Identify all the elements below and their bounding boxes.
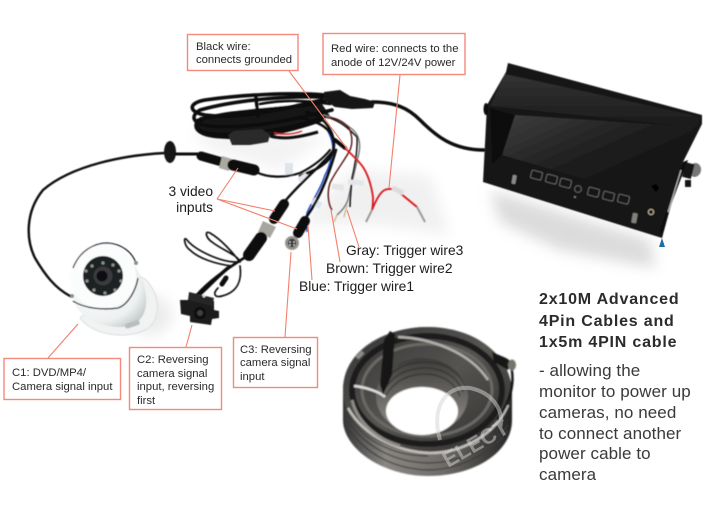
wire bundle xyxy=(192,94,332,145)
monitor buttons xyxy=(530,170,630,204)
text block: cable description: to connect another xyxy=(539,424,682,443)
callout: C3: C3: Reversing xyxy=(240,344,312,356)
trigger wires xyxy=(285,112,425,232)
callout: C3: camera signal xyxy=(240,357,310,369)
heading: cables: 1x5m 4PIN cable xyxy=(539,334,677,351)
callout: C3: input xyxy=(240,371,265,383)
photo shadows xyxy=(128,130,655,335)
text block: cable description: cameras, no need xyxy=(539,403,676,422)
label: brown trigger wire: Brown: Trigger wire2 xyxy=(326,261,453,276)
label: 3 video inputs: inputs xyxy=(176,200,213,215)
text block: cable description xyxy=(539,361,691,484)
icon: monitor with sun hood xyxy=(483,63,703,238)
callout: black wire: connects grounded xyxy=(196,54,292,66)
callout: C1: Camera signal input xyxy=(12,381,113,393)
callout leader lines xyxy=(48,71,400,358)
marker xyxy=(659,238,665,247)
text block: cable description: - allowing the xyxy=(539,361,640,380)
text block: cable description: power cable to xyxy=(539,444,651,463)
label: blue trigger wire: Blue: Trigger wire1 xyxy=(299,279,414,294)
video connector C2 xyxy=(249,152,332,255)
text block: cable description: monitor to power up xyxy=(539,382,691,401)
callout: red wire: Red wire: connects to the xyxy=(331,43,458,55)
callout: C3 xyxy=(234,338,318,388)
label: 3 video inputs xyxy=(168,184,213,215)
callout: C2: C2: Reversing xyxy=(137,354,209,366)
callout: black wire xyxy=(188,34,298,70)
icon: dome camera xyxy=(70,243,157,335)
icon: reversing camera xyxy=(180,292,219,325)
callout: C1: C1: DVD/MP4/ xyxy=(12,367,87,379)
callout: C2 xyxy=(130,348,222,410)
watermark xyxy=(437,388,513,472)
label: 3 video inputs: 3 video xyxy=(168,184,213,199)
camera cable loops xyxy=(185,232,244,297)
callout: black wire: Black wire: xyxy=(196,41,251,53)
callout: red wire: anode of 12V/24V power xyxy=(331,57,456,69)
wiring harness xyxy=(29,90,484,297)
text block: cable description: camera xyxy=(539,465,597,484)
label: gray trigger wire: Gray: Trigger wire3 xyxy=(346,243,464,258)
heading: cables xyxy=(539,291,679,351)
heading: cables: 2x10M Advanced xyxy=(539,291,679,308)
callout: C2: first xyxy=(137,395,156,407)
icon: cable coil xyxy=(343,327,516,476)
heading: cables: 4Pin Cables and xyxy=(539,313,675,330)
callout: C2: camera signal xyxy=(137,368,207,380)
watermark: ELECT xyxy=(438,414,513,472)
callout: C1 xyxy=(4,358,120,400)
video connector C3 xyxy=(285,150,336,250)
main cable to monitor xyxy=(324,90,484,150)
callout: C2: input, reversing xyxy=(137,381,214,393)
callout: red wire xyxy=(323,34,465,74)
video cable C1 xyxy=(29,141,330,296)
